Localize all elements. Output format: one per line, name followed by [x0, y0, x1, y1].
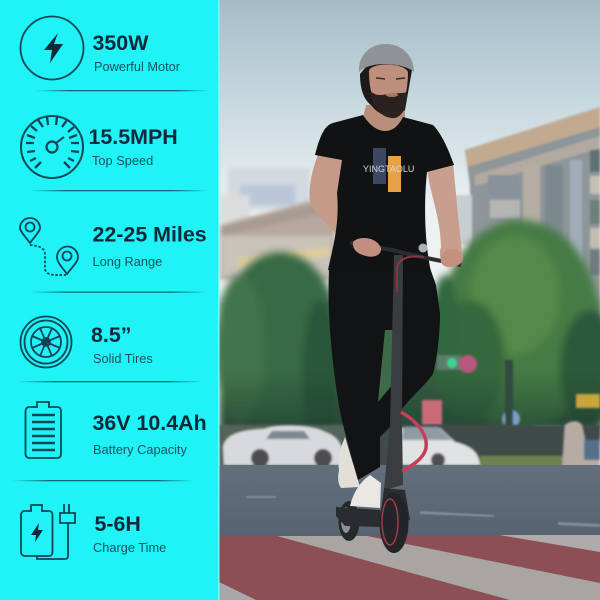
item: battery	[26, 402, 207, 458]
heading: 350W: 350W	[92, 31, 149, 55]
distant white building	[220, 168, 310, 223]
parked cars and roadside	[219, 421, 600, 470]
road	[219, 465, 600, 537]
item: speed	[21, 116, 178, 178]
scooter frame	[336, 243, 461, 553]
label: Long Range: Long Range	[92, 254, 162, 269]
icon: speedometer	[21, 116, 83, 178]
label: Top Speed: Top Speed	[92, 153, 153, 168]
bell	[418, 244, 428, 252]
helmet	[359, 44, 414, 72]
t-shirt	[315, 115, 454, 275]
crosswalk	[219, 535, 600, 600]
left tan buildings	[220, 201, 335, 280]
traffic lights and signs	[383, 354, 600, 460]
icon: wheel	[20, 316, 72, 368]
gap between legs	[378, 330, 393, 402]
shirt print	[363, 148, 414, 192]
item: tires	[20, 316, 153, 368]
right building	[456, 107, 600, 330]
label: Powerful Motor: Powerful Motor	[94, 59, 181, 74]
item: range	[20, 218, 207, 275]
right shoe	[350, 475, 381, 508]
heading: 5-6H: 5-6H	[94, 512, 141, 536]
cable arc	[397, 256, 424, 292]
left arm	[309, 155, 380, 254]
label: Charge Time: Charge Time	[93, 540, 166, 555]
red cable	[401, 412, 426, 471]
heading: 22-25 Miles: 22-25 Miles	[92, 222, 207, 246]
label: Solid Tires: Solid Tires	[93, 351, 153, 366]
stem	[384, 255, 403, 490]
item: motor	[20, 16, 181, 80]
icon: battery with charger	[21, 504, 75, 559]
icon: battery	[26, 402, 61, 458]
road lane marks	[246, 496, 600, 527]
right arm	[427, 162, 462, 266]
photo background: street scene	[215, 0, 600, 600]
icon: map pins with route	[20, 218, 78, 275]
icon: lightning in circle	[20, 16, 84, 80]
deck	[336, 507, 382, 527]
left cyan panel	[0, 0, 220, 600]
front wheel	[380, 493, 408, 553]
head	[359, 44, 414, 118]
hands	[353, 238, 463, 267]
rider on scooter	[309, 44, 463, 553]
shirt print: YINGTAOLU	[363, 164, 414, 174]
neck	[363, 105, 405, 133]
trees	[215, 220, 600, 440]
item: charge	[21, 504, 166, 559]
heading: 15.5MPH: 15.5MPH	[88, 125, 178, 149]
sky	[219, 0, 600, 300]
left leg and shoe	[329, 268, 440, 488]
fork and fender	[381, 488, 410, 521]
heading: 36V 10.4Ah: 36V 10.4Ah	[92, 411, 207, 435]
label: Battery Capacity: Battery Capacity	[93, 442, 187, 457]
heading: 8.5 inch: 8.5”	[91, 323, 131, 347]
handlebar	[350, 243, 461, 265]
rear wheel	[338, 501, 360, 541]
